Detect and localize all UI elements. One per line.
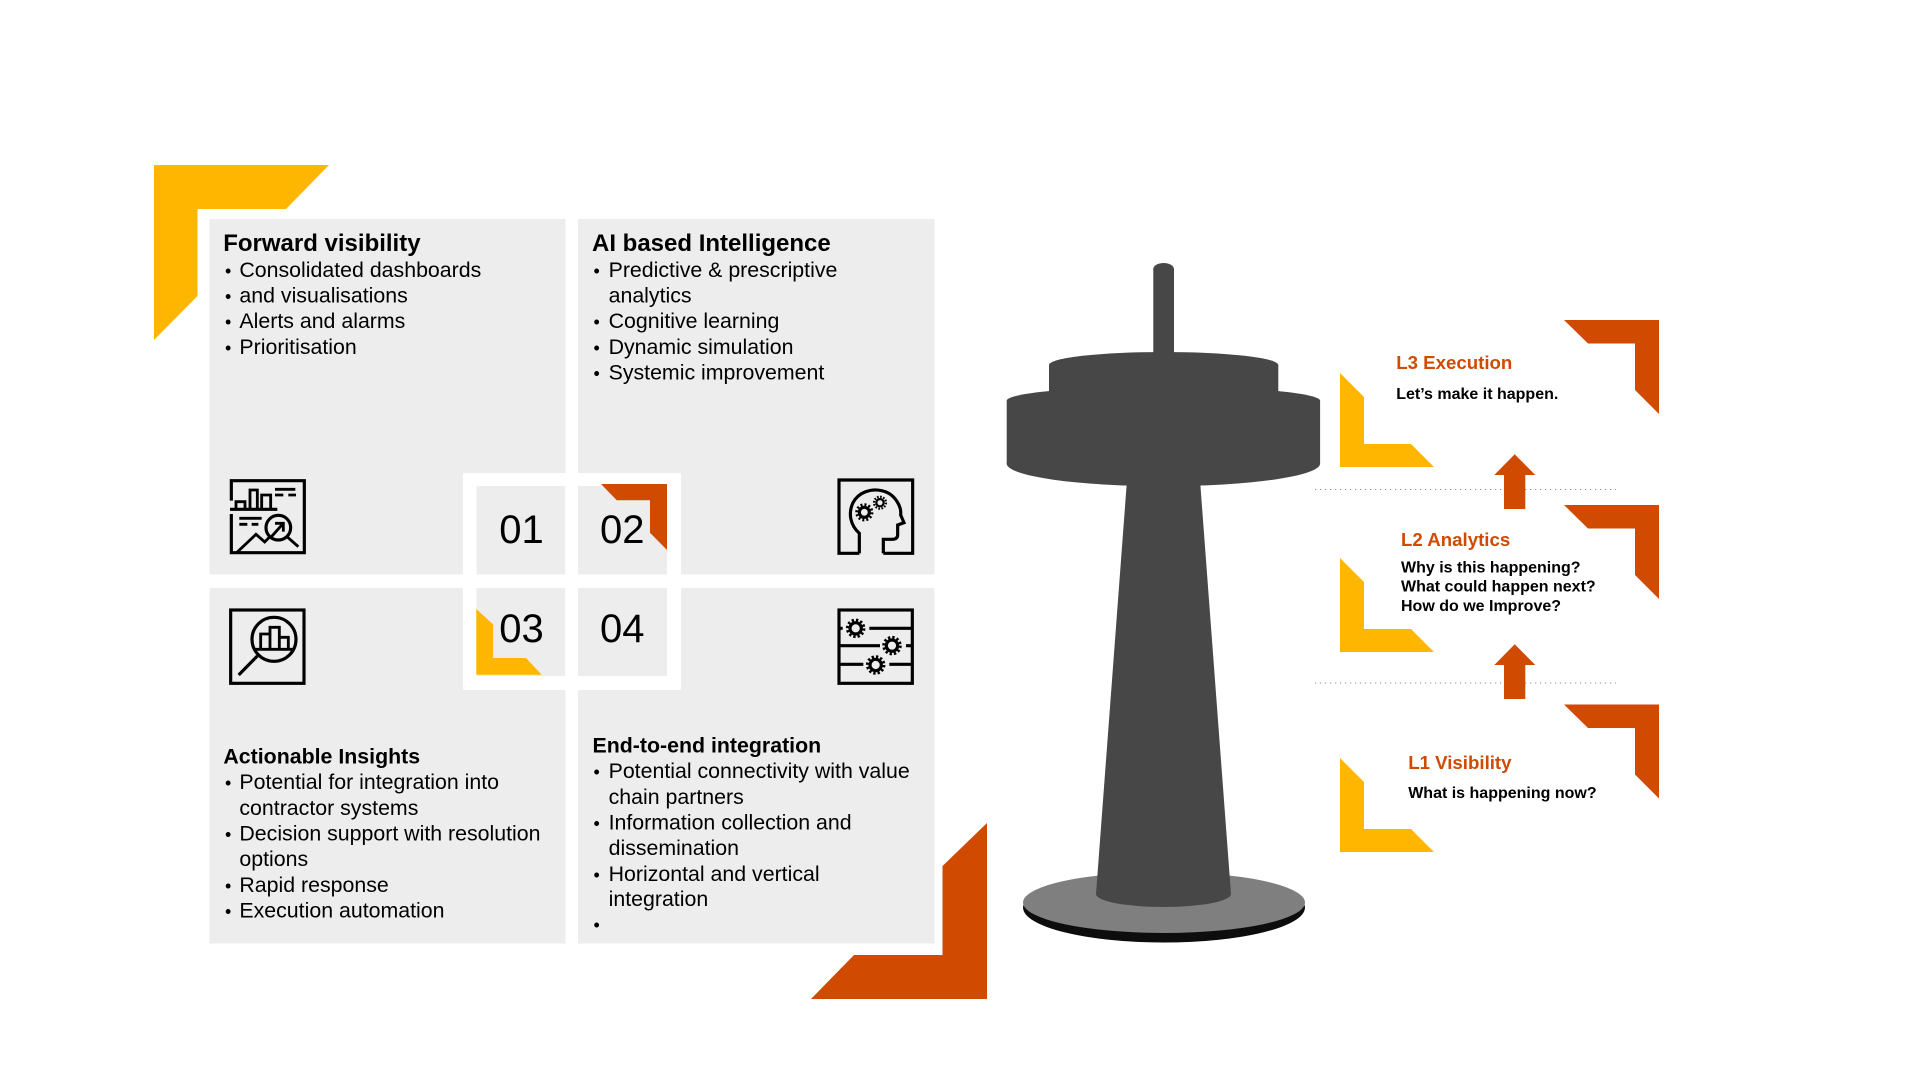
list: AI based intelligence: Predictive & prescriptive: [609, 258, 837, 282]
tile 02: [578, 484, 667, 574]
list: actionable insights: Decision support with resolution: [239, 822, 541, 846]
heading: forward visibility: Forward visibility: [223, 230, 421, 257]
heading: L2 analytics: L2 Analytics: [1401, 529, 1510, 550]
tile 03: [476, 588, 565, 676]
yellow corner bracket: top left: [154, 165, 329, 340]
list: actionable insights: options: [239, 847, 308, 871]
panel: forward visibility: [210, 219, 566, 574]
level block: L2 analytics: [1340, 505, 1659, 652]
arrow: L2 up to L3: [1494, 454, 1535, 509]
text: L3 question: Let’s make it happen.: [1396, 386, 1558, 403]
text: L2 questions: How do we Improve?: [1401, 598, 1561, 615]
list: AI based intelligence: •: [594, 364, 600, 384]
list: forward visibility: Consolidated dashboards: [239, 258, 481, 282]
list: AI based intelligence: •: [594, 338, 600, 358]
level block: L1 visibility: [1340, 704, 1659, 852]
list: actionable insights: •: [225, 902, 231, 922]
list: forward visibility: •: [225, 338, 231, 358]
list: forward visibility: Prioritisation: [239, 335, 357, 359]
orange corner bracket: bottom right: [811, 823, 987, 999]
list: actionable insights: Potential for integration into: [239, 770, 499, 794]
list: end-to-end integration: dissemination: [609, 836, 739, 860]
list: end-to-end integration: Information collection and: [609, 810, 852, 834]
list: AI based intelligence: analytics: [609, 284, 692, 308]
tile 01: [476, 486, 565, 574]
tile 03: 03: [499, 607, 544, 651]
list: end-to-end integration: integration: [609, 887, 708, 911]
list: forward visibility: and visualisations: [239, 284, 408, 308]
icon: magnifier over bar chart: [231, 610, 304, 683]
list: forward visibility: •: [225, 286, 231, 306]
list: AI based intelligence: [594, 258, 837, 384]
list: end-to-end integration: Potential connectivity with value: [609, 759, 910, 783]
heading: actionable insights: Actionable Insights: [223, 744, 420, 768]
list: actionable insights: Execution automation: [239, 898, 445, 922]
list: AI based intelligence: •: [594, 261, 600, 281]
heading: L1 visibility: L1 Visibility: [1408, 752, 1512, 773]
heading: AI based intelligence: AI based Intelligence: [592, 230, 831, 257]
list: actionable insights: •: [225, 824, 231, 844]
heading: end-to-end integration: End-to-end integration: [592, 734, 821, 758]
icon: dashboard report with magnifier: [230, 481, 304, 553]
text: L2 questions: What could happen next?: [1401, 579, 1596, 596]
tile 04: 04: [600, 607, 644, 651]
list: AI based intelligence: Cognitive learning: [609, 309, 779, 333]
icon: settings sliders with gears: [839, 610, 912, 683]
text: L2 questions: Why is this happening?: [1401, 559, 1581, 576]
list: actionable insights: •: [225, 876, 231, 896]
tile 04: [578, 588, 667, 676]
list: actionable insights: Rapid response: [239, 873, 389, 897]
level block: L3 execution: [1340, 320, 1659, 467]
heading: L3 execution: L3 Execution: [1396, 352, 1512, 373]
tile 02: 02: [600, 508, 644, 552]
list: actionable insights: contractor systems: [239, 796, 418, 820]
list: actionable insights: •: [225, 773, 231, 793]
panel: actionable insights: [210, 588, 566, 944]
text: L1 question: What is happening now?: [1408, 785, 1597, 802]
list: forward visibility: [225, 258, 481, 359]
divider: L3 and L2: [1315, 488, 1616, 490]
list: forward visibility: •: [225, 312, 231, 332]
list: forward visibility: Alerts and alarms: [239, 309, 405, 333]
list: end-to-end integration: •: [594, 814, 600, 834]
list: AI based intelligence: Dynamic simulation: [609, 335, 794, 359]
tower illustration: [1007, 263, 1320, 942]
list: AI based intelligence: •: [594, 312, 600, 332]
panel: AI based intelligence: [578, 219, 934, 574]
panel: end-to-end integration: [578, 588, 934, 944]
list: AI based intelligence: Systemic improvement: [609, 360, 824, 384]
tile 01: 01: [499, 508, 544, 552]
list: actionable insights: [225, 770, 541, 922]
list: end-to-end integration: •: [594, 915, 600, 935]
arrow: L1 up to L2: [1494, 644, 1535, 699]
list: end-to-end integration: •: [594, 762, 600, 782]
divider: L2 and L1: [1315, 682, 1616, 684]
list: end-to-end integration: [594, 759, 910, 935]
number grid: 01 to 04: [463, 473, 681, 690]
list: end-to-end integration: Horizontal and vertical: [609, 862, 820, 886]
list: forward visibility: •: [225, 261, 231, 281]
list: end-to-end integration: •: [594, 865, 600, 885]
list: end-to-end integration: chain partners: [609, 785, 744, 809]
icon: head with gears: [839, 480, 913, 553]
